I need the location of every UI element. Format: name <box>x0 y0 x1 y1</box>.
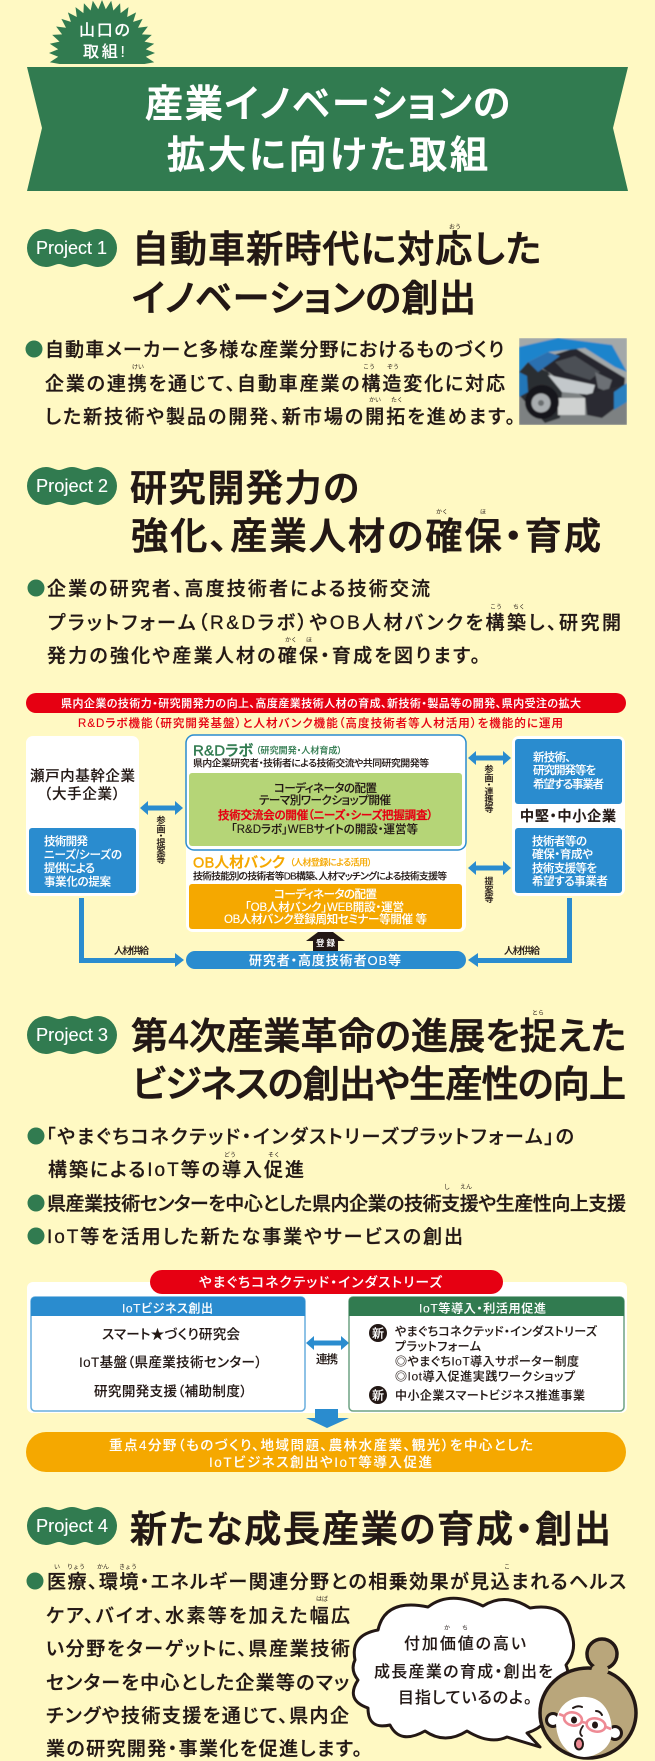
panel: large companies: ニーズ/シーズの <box>44 848 122 862</box>
red goal bar: 県内企業の技術力・研究開発力の向上、高度産業技術人材の育成、新技術・製品等の開発、県内受注の拡大 <box>61 696 581 710</box>
panel: IoT adoption: プラットフォーム <box>395 1340 481 1354</box>
project 1 badge: Project 1 <box>36 238 107 258</box>
project 4 heading <box>27 1507 611 1550</box>
panel: small and medium companies <box>512 736 625 896</box>
panel: large companies <box>26 736 139 896</box>
burst badge: 山口の取組! <box>49 0 155 64</box>
panel: IoT adoption: IoT等導入・利活用促進 <box>419 1300 546 1316</box>
panel: small and medium companies: 技術者等の <box>532 834 587 848</box>
panel: R&D lab and OB bank <box>186 735 466 932</box>
title banner: 拡大に向けた取組 <box>167 135 488 177</box>
project 1 title: おう <box>449 224 461 231</box>
project 4 body text: こ <box>504 1564 510 1571</box>
arrow: upper right double <box>468 751 511 765</box>
project 1 body text: かい <box>369 397 381 404</box>
project 1 body text <box>26 339 515 428</box>
OB bank orange box <box>189 884 462 929</box>
project 2 body text: ほ <box>306 637 312 644</box>
pill: researchers and OB <box>186 951 466 969</box>
project 1 heading <box>27 224 541 319</box>
R&D lab heading: R&Dラボ <box>193 742 254 760</box>
project 3 badge: Project 3 <box>36 1025 108 1045</box>
project 2 body text: プラットフォーム（R&Dラボ）やOB人材バンクを構築し、研究開 <box>48 612 621 634</box>
project 2 body text: 発力の強化や産業人材の確保・育成を図ります。 <box>47 645 480 667</box>
OB bank heading: （人材登録による活用） <box>290 856 372 868</box>
project 3 title: 第4次産業革命の進展を捉えた <box>131 1016 626 1057</box>
project 4 body text: 医療、環境・エネルギー関連分野との相乗効果が見込まれるヘルス <box>47 1571 626 1593</box>
panel: small and medium companies: 中堅・中小企業 <box>520 808 616 824</box>
red goal bar <box>26 693 626 713</box>
project 4 body text: きょう <box>119 1564 137 1571</box>
project 4 body text <box>26 1564 626 1760</box>
panel: IoT business creation: スマート★づくり研究会 <box>102 1327 240 1342</box>
panel: IoT adoption: やまぐちコネクテッド・インダストリーズ <box>395 1324 598 1338</box>
OB bank heading <box>193 854 447 882</box>
diagram: R&D lab and OB bank <box>26 693 626 969</box>
red title pill: やまぐちコネクテッド・インダストリーズ <box>199 1274 442 1290</box>
arrow: down <box>306 1409 349 1428</box>
R&D lab heading <box>193 742 429 770</box>
project 4 body text: ケア、バイオ、水素等を加えた幅広 <box>46 1605 350 1627</box>
project 1 body text: 自動車メーカーと多様な産業分野におけるものづくり <box>45 339 504 361</box>
arrow: lower right double <box>468 861 511 875</box>
panel: large companies: 事業化の提案 <box>44 874 112 888</box>
project 3 bullet list: えん <box>460 1184 472 1191</box>
panel: IoT adoption: 中小企業スマートビジネス推進事業 <box>395 1388 585 1402</box>
project 3 bullet list: 「やまぐちコネクテッド・インダストリーズプラットフォーム」の <box>46 1125 574 1148</box>
diagram: Yamaguchi connected industries <box>26 1270 627 1472</box>
panel: large companies: （大手企業） <box>44 786 120 803</box>
project 1 badge <box>27 229 117 267</box>
project 4 body text: 業の研究開発・事業化を促進します。 <box>46 1738 362 1760</box>
project 3 title: とら <box>532 1010 544 1017</box>
OB bank orange box: OB人材バンク登録周知セミナー等開催 等 <box>224 912 427 926</box>
orange result pill: 重点4分野（ものづくり、地域問題、農林水産業、観光）を中心とした <box>109 1437 533 1453</box>
project 2 body text <box>28 578 621 667</box>
burst badge: 山口の取組!: 取組! <box>83 43 125 61</box>
arrow: right talent supply <box>468 898 572 967</box>
panel: IoT adoption: 新 <box>372 1388 384 1402</box>
project 2 badge: Project 2 <box>36 476 108 496</box>
project 1 title: 自動車新時代に対応した <box>132 229 541 270</box>
arrow: right talent supply: 人材供給 <box>504 944 540 957</box>
label: participation left: 参画・提案等 <box>156 815 166 865</box>
OB bank heading: 技術技能別の技術者等DB構築、人材マッチングによる技術支援等 <box>193 870 447 882</box>
speech bubble: 付加価値の高い <box>404 1635 526 1653</box>
panel: IoT business creation: IoT基盤（県産業技術センター） <box>79 1354 262 1370</box>
panel: large companies: 提供による <box>44 861 95 875</box>
panel: IoT adoption: 新 <box>372 1326 384 1340</box>
project 4 body text: い <box>54 1564 60 1571</box>
R&D lab green box: テーマ別ワークショップ開催 <box>259 793 392 807</box>
project 2 body text: こう <box>490 604 502 611</box>
OB bank orange box: コーディネータの配置 <box>274 887 378 901</box>
project 3 bullet list: そく <box>268 1152 280 1159</box>
arrow: registration <box>306 932 345 951</box>
project 4 body text: かん <box>97 1564 109 1571</box>
panel: IoT business creation: 研究開発支援（補助制度） <box>94 1384 247 1399</box>
project 2 title: かく <box>436 509 448 516</box>
panel: large companies: 技術開発 <box>44 834 88 848</box>
label: participation right: 参画・連携等 <box>484 764 494 814</box>
project 1 body text: 企業の連携を通じて、自動車産業の構造変化に対応 <box>45 373 505 395</box>
project 1 body text: こう <box>363 364 375 371</box>
speech bubble: 目指しているのよ。 <box>398 1689 532 1707</box>
project 4 body text: はば <box>316 1595 328 1603</box>
title banner <box>27 67 628 191</box>
panel: small and medium companies: 新技術、 <box>533 750 571 764</box>
panel: small and medium companies: 技術支援等を <box>532 861 597 875</box>
arrow: left talent supply <box>79 898 184 967</box>
project 4 badge: Project 4 <box>36 1516 108 1536</box>
burst badge: 山口の取組!: 山口の <box>79 22 130 40</box>
speech bubble: 成長産業の育成・創出を <box>374 1663 553 1681</box>
arrow: registration: 登録 <box>316 938 335 948</box>
project 3 badge <box>27 1016 117 1054</box>
project 4 title: 新たな成長産業の育成・創出 <box>130 1509 611 1550</box>
panel: small and medium companies: 希望する事業者 <box>532 874 608 888</box>
project 3 bullet list: 構築によるIoT等の導入促進 <box>48 1159 304 1181</box>
title banner: 産業イノベーションの <box>145 84 510 126</box>
project 2 heading <box>27 467 601 557</box>
panel: large companies: 瀬戸内基幹企業 <box>30 768 136 785</box>
project 1 body text: ぞう <box>387 364 399 371</box>
project 2 title: ほ <box>480 509 486 516</box>
panel: small and medium companies: 確保・育成や <box>532 847 593 861</box>
panel: small and medium companies: 希望する事業者 <box>533 777 604 791</box>
R&D lab green box: コーディネータの配置 <box>274 781 378 795</box>
R&D lab heading: （研究開発・人材育成） <box>256 744 342 756</box>
arrow: collaboration <box>306 1336 349 1366</box>
project 2 body text: 企業の研究者、高度技術者による技術交流 <box>47 578 430 600</box>
project 4 body text: りょう <box>67 1564 85 1571</box>
project 1 body text: けい <box>132 364 144 371</box>
project 2 title <box>130 468 601 557</box>
panel: IoT adoption: ◎やまぐちIoT導入サポーター制度 <box>395 1354 579 1368</box>
project 3 bullet list: し <box>444 1184 450 1191</box>
project 3 bullet list: 県産業技術センターを中心とした県内企業の技術支援や生産性向上支援 <box>47 1193 626 1215</box>
project 1 body text: たく <box>391 397 403 404</box>
project 1 body text: した新技術や製品の開発、新市場の開拓を進めます。 <box>45 406 515 428</box>
character: woman with glasses <box>540 1639 636 1758</box>
project 2 title: 強化、産業人材の確保・育成 <box>131 516 601 557</box>
speech bubble: ち <box>462 1625 468 1632</box>
R&D lab green box <box>189 773 462 846</box>
panel: IoT business creation: IoTビジネス創出 <box>122 1302 213 1316</box>
panel: small and medium companies: 研究開発等を <box>533 763 596 777</box>
project 1 title: イノベーションの創出 <box>132 278 476 319</box>
speech bubble <box>353 1598 574 1747</box>
R&D lab green box: 技術交流会の開催（ニーズ・シーズ把握調査） <box>218 808 433 822</box>
label: proposals: 提案等 <box>484 876 494 904</box>
project 2 body text: かく <box>285 637 297 644</box>
project 4 body text: チングや技術支援を通じて、県内企 <box>46 1705 349 1727</box>
project 2 badge <box>27 467 117 505</box>
project 4 body text: い分野をターゲットに、県産業技術 <box>46 1638 350 1660</box>
red subtitle: R&Dラボ機能（研究開発基盤）と人材バンク機能（高度技術者等人材活用）を機能的に運用 <box>78 716 563 730</box>
arrow: left talent supply: 人材供給 <box>114 944 149 957</box>
project 1 title <box>132 224 541 319</box>
project 2 body text: ちく <box>513 604 525 611</box>
project 3 title: ビジネスの創出や生産性の向上 <box>132 1064 626 1105</box>
orange result pill: IoTビジネス創出やIoT等導入促進 <box>209 1454 432 1470</box>
project 3 bullet list <box>28 1125 626 1248</box>
orange result pill <box>26 1432 626 1472</box>
panel: IoT adoption <box>349 1297 624 1411</box>
project 4 badge <box>27 1507 117 1545</box>
project 4 body text: センターを中心とした企業等のマッ <box>46 1672 349 1694</box>
panel: IoT adoption: ◎Iot導入促進実践ワークショップ <box>395 1368 575 1384</box>
arrow: left double <box>140 801 183 815</box>
OB bank orange box: 「OB人材バンク」WEB開設・運営 <box>245 900 404 914</box>
project 2 title: 研究開発力の <box>130 468 359 509</box>
project 3 bullet list: IoT等を活用した新たな事業やサービスの創出 <box>47 1226 463 1248</box>
photo: car with open hood <box>519 338 627 425</box>
project 3 heading <box>27 1010 626 1105</box>
red title pill <box>150 1270 503 1294</box>
speech bubble: か <box>444 1625 450 1632</box>
R&D lab green box: 「R&Dラボ」WEBサイトの開設・運営等 <box>231 822 418 836</box>
project 3 bullet list: どう <box>224 1151 236 1159</box>
project 3 title <box>131 1010 626 1105</box>
pill: researchers and OB: 研究者・高度技術者OB等 <box>249 953 401 968</box>
R&D lab heading: 県内企業研究者・技術者による技術交流や共同研究開発等 <box>193 756 429 770</box>
arrow: collaboration: 連携 <box>316 1352 338 1366</box>
OB bank heading: OB人材バンク <box>193 854 285 872</box>
panel: IoT business creation <box>31 1297 305 1411</box>
